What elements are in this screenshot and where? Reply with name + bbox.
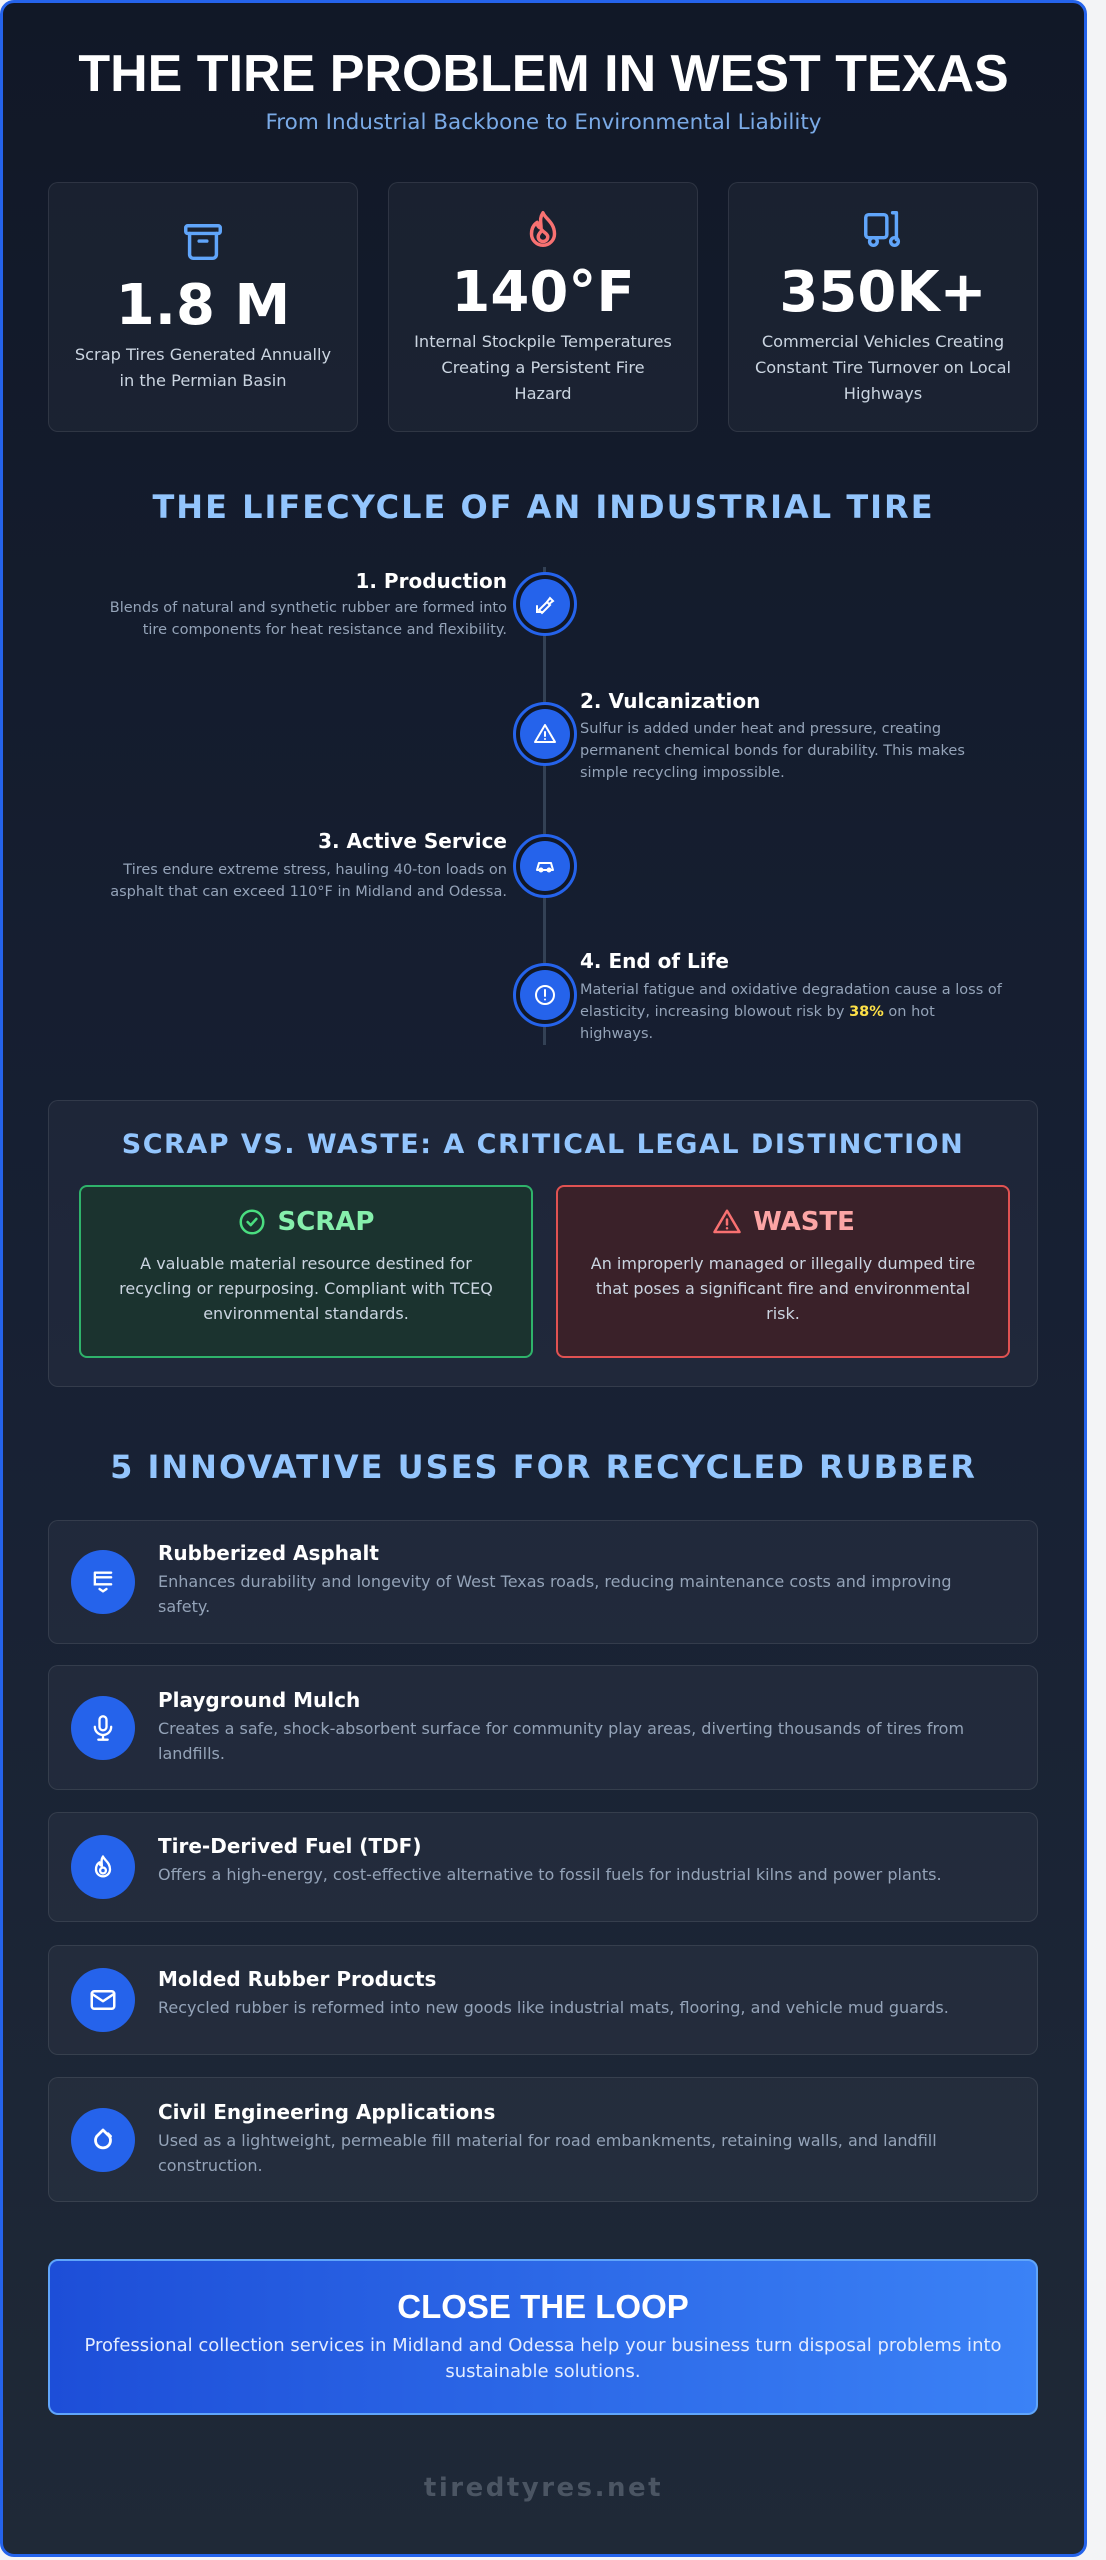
icon: asphalt: [71, 1550, 135, 1614]
use card: tire-derived fuel: [48, 1812, 1038, 1922]
heading: waste with warning icon: WASTE: [753, 1207, 855, 1237]
stat card: temperature: [388, 182, 698, 432]
use card: rubberized asphalt: Rubberized Asphalt: [158, 1541, 379, 1565]
heading: innovative uses: 5 INNOVATIVE USES FOR RECYCLED RUBBER: [110, 1448, 977, 1486]
use card: molded rubber: [48, 1945, 1038, 2055]
icon: flame: [530, 210, 556, 247]
step 4: end of life: Material fatigue and oxidative degradation cause a loss of elasticity, increasing blowout risk by 38% on hot highways.: [580, 982, 1002, 1042]
stat card: vehicles: 350K+: [779, 260, 987, 325]
use card: tire-derived fuel: Offers a high-energy, cost-effective alternative to fossil fuels for industrial kilns and power plants.: [158, 1865, 942, 1884]
step 4: end of life: 4. End of Life: [580, 949, 729, 973]
use card: tire-derived fuel: Tire-Derived Fuel (TDF): [158, 1834, 421, 1858]
box: scrap: A valuable material resource destined for recycling or repurposing. Compliant with TCEQ environmental standards.: [119, 1254, 493, 1323]
step 2: vulcanization: 2. Vulcanization: [580, 689, 760, 713]
icon: truck: [864, 211, 900, 247]
callout: close the loop: Professional collection services in Midland and Odessa help your business turn disposal problems into sustainable solutions.: [84, 2335, 1002, 2382]
icon: envelope: [71, 1968, 135, 2032]
subtitle: From Industrial Backbone to Environmental Liability: [266, 110, 822, 135]
use card: molded rubber: Molded Rubber Products: [158, 1967, 436, 1991]
step 3: active service: 3. Active Service: [318, 829, 507, 853]
stat card: temperature: Internal Stockpile Temperatures Creating a Persistent Fire Hazard: [414, 332, 672, 403]
icon: microphone: [71, 1696, 135, 1760]
use card: civil engineering: [48, 2077, 1038, 2202]
step 1: production: [110, 569, 577, 638]
heading: lifecycle: THE LIFECYCLE OF AN INDUSTRIAL TIRE: [152, 488, 935, 526]
stat card: vehicles: Commercial Vehicles Creating Constant Tire Turnover on Local Highways: [755, 332, 1011, 403]
use card: playground mulch: Creates a safe, shock-absorbent surface for community play areas, diverting thousands of tires from landfills.: [158, 1719, 964, 1763]
stat card: scrap tires: [48, 182, 358, 432]
step 1: production: 1. Production: [355, 569, 507, 593]
callout: close the loop: [48, 2259, 1038, 2415]
panel: scrap vs waste: [48, 1100, 1038, 1387]
use card: rubberized asphalt: [48, 1520, 1038, 1644]
step 3: active service: [110, 829, 577, 900]
step 2: vulcanization: Sulfur is added under heat and pressure, creating permanent chemical bonds for durability. This makes simple recycling impossible.: [580, 721, 965, 781]
use card: civil engineering: Civil Engineering Applications: [158, 2100, 495, 2124]
stat card: scrap tires: 1.8 M: [116, 273, 290, 338]
step 2: vulcanization: [513, 689, 965, 781]
use card: molded rubber: Recycled rubber is reformed into new goods like industrial mats, flooring, and vehicle mud guards.: [158, 1998, 949, 2017]
heading: scrap with check icon: SCRAP: [277, 1207, 374, 1237]
timeline: [110, 567, 1002, 1045]
footer: website: tiredtyres.net: [424, 2473, 663, 2503]
title: THE TIRE PROBLEM IN WEST TEXAS: [78, 45, 1009, 103]
icon: drop: [71, 2108, 135, 2172]
icon: alert: [513, 963, 577, 1027]
use card: rubberized asphalt: Enhances durability and longevity of West Texas roads, reducing maintenance costs and improving safety.: [158, 1572, 952, 1616]
icon: production: [513, 572, 577, 636]
box: waste: [556, 1185, 1010, 1358]
use card: playground mulch: Playground Mulch: [158, 1688, 360, 1712]
box: scrap: [79, 1185, 533, 1358]
use card: playground mulch: [48, 1665, 1038, 1790]
icon: vehicle: [513, 834, 577, 898]
heading: scrap vs waste: SCRAP VS. WASTE: A CRITICAL LEGAL DISTINCTION: [122, 1129, 964, 1160]
step 3: active service: Tires endure extreme stress, hauling 40-ton loads on asphalt that can exceed 110°F in Midland and Odessa.: [110, 862, 507, 900]
box: waste: An improperly managed or illegally dumped tire that poses a significant fire and environmental risk.: [591, 1254, 975, 1323]
icon: warning: [513, 702, 577, 766]
stat card: vehicles: [728, 182, 1038, 432]
step 1: production: Blends of natural and synthetic rubber are formed into tire components for heat resistance and flexibility.: [110, 600, 507, 638]
step 4: end of life: [513, 949, 1002, 1042]
use card: civil engineering: Used as a lightweight, permeable fill material for road embankments, retaining walls, and landfill construction.: [158, 2131, 937, 2175]
callout: close the loop: CLOSE THE LOOP: [397, 2288, 689, 2325]
stat card: scrap tires: Scrap Tires Generated Annually in the Permian Basin: [75, 345, 331, 390]
icon: flame: [71, 1835, 135, 1899]
stat card: temperature: 140°F: [451, 260, 635, 325]
icon: archive box: [184, 224, 222, 260]
